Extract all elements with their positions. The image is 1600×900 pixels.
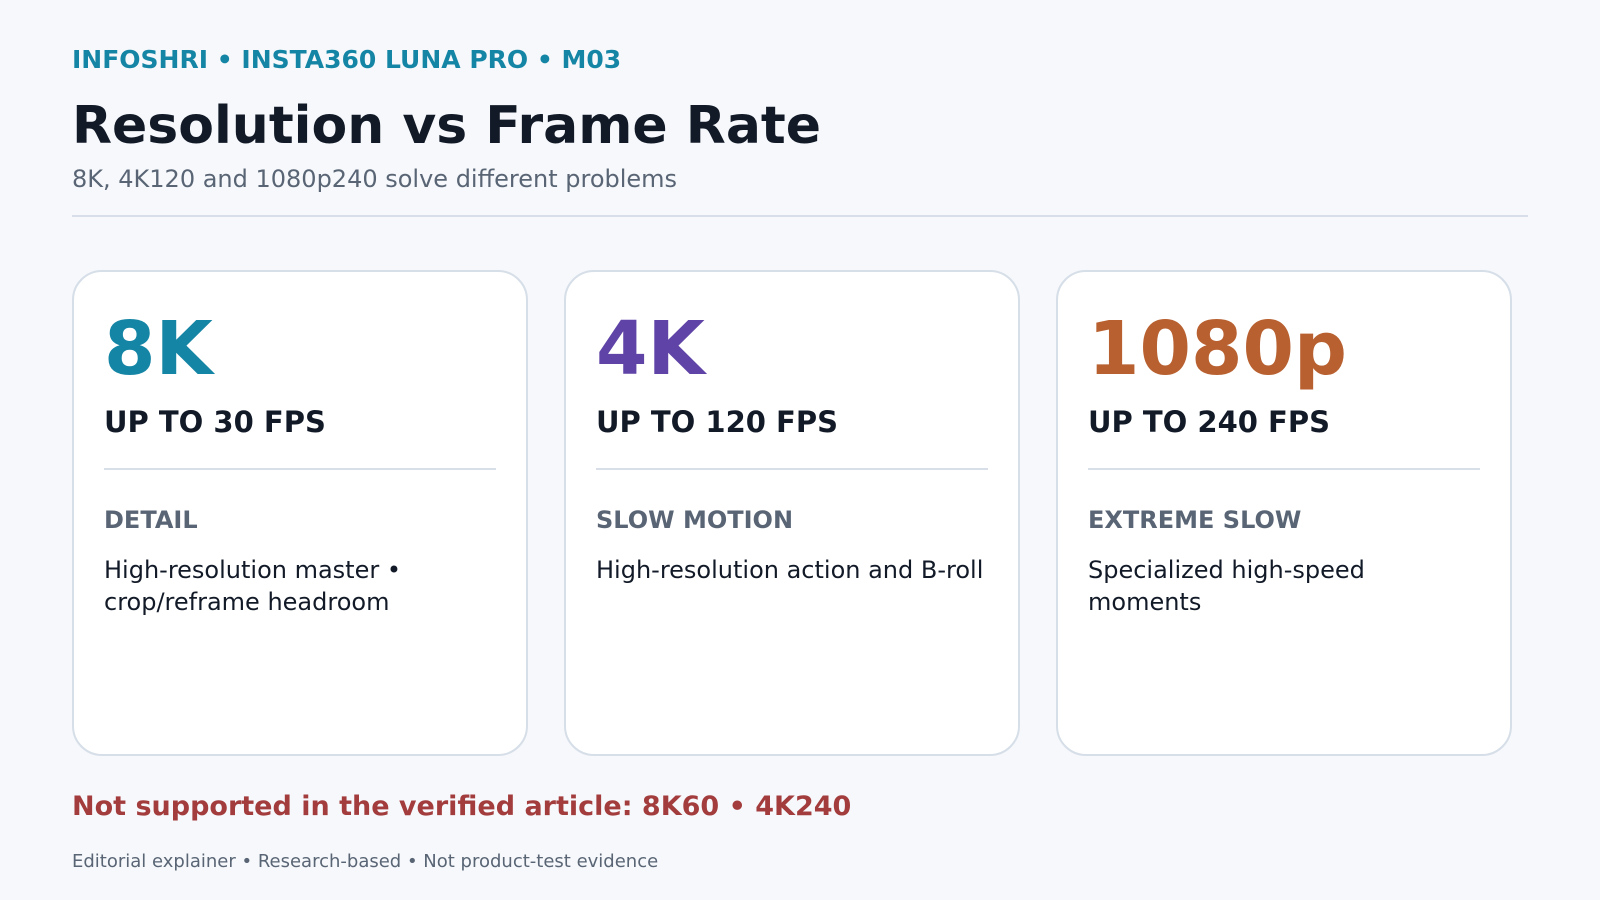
footer: Editorial explainer • Research-based • Not product-test evidence xyxy=(72,851,658,872)
resolution 4K: 4K xyxy=(596,306,705,392)
frame rate 240: UP TO 240 FPS xyxy=(1088,405,1330,439)
panel: 8K xyxy=(72,270,528,756)
kicker: INFOSHRI • INSTA360 LUNA PRO • M03 xyxy=(72,45,621,74)
frame rate 120: UP TO 120 FPS xyxy=(596,405,838,439)
use label extreme slow: EXTREME SLOW xyxy=(1088,506,1301,534)
description 8K xyxy=(104,556,401,616)
description 1080p xyxy=(1088,556,1365,616)
description 1080p: moments xyxy=(1088,588,1201,616)
description 8K: High-resolution master • xyxy=(104,556,401,584)
frame rate 30: UP TO 30 FPS xyxy=(104,405,326,439)
description 8K: crop/reframe headroom xyxy=(104,588,389,616)
panel: 1080p xyxy=(1056,270,1512,756)
description 4K: High-resolution action and B-roll xyxy=(596,556,983,584)
title: Resolution vs Frame Rate xyxy=(72,96,821,156)
description 1080p: Specialized high-speed xyxy=(1088,556,1365,584)
warning note: Not supported in the verified article: 8K60 • 4K240 xyxy=(72,791,851,822)
subtitle: 8K, 4K120 and 1080p240 solve different problems xyxy=(72,165,677,193)
use label detail: DETAIL xyxy=(104,506,198,534)
use label slow motion: SLOW MOTION xyxy=(596,506,793,534)
resolution 8K: 8K xyxy=(104,306,213,392)
panel: 4K xyxy=(564,270,1020,756)
resolution 1080p: 1080p xyxy=(1088,306,1347,392)
